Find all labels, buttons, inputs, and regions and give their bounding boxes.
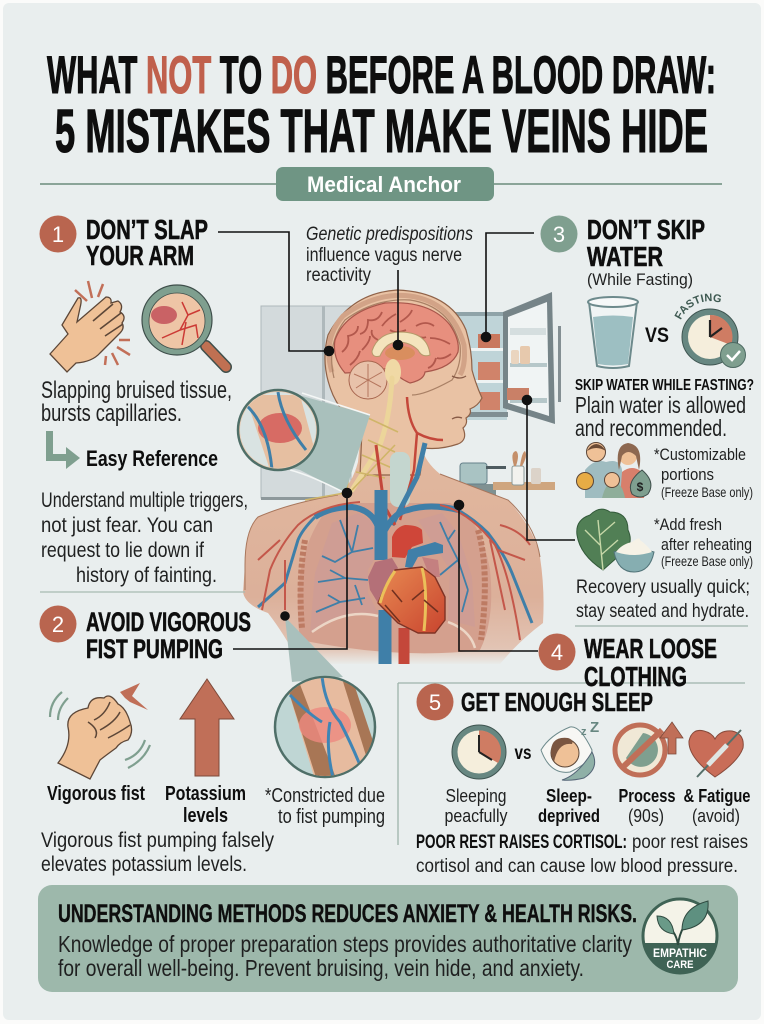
heading 1: YOUR ARM: [86, 240, 194, 271]
number badge 3: [540, 216, 578, 252]
icon: sleeping person: [541, 719, 599, 780]
label: constricted note: *Constricted due: [265, 785, 385, 807]
labels: sleep comparison: [444, 786, 750, 826]
text: fist pumping explanation: elevates potassium levels.: [41, 853, 247, 876]
genetic predispositions note: reactivity: [306, 265, 371, 286]
arrow: easy reference: [46, 431, 80, 469]
icon: sleep clock: [452, 725, 506, 779]
heart: [368, 525, 445, 633]
torso and shoulders: [243, 440, 544, 664]
number badge 1: 1: [52, 222, 64, 247]
text: add fresh: *Add fresh: [654, 515, 722, 534]
genetic predispositions note: Genetic predispositions: [306, 224, 473, 245]
number badge 5: 5: [429, 690, 441, 715]
icon: heart with syringe: [689, 730, 743, 777]
text: multiple triggers: history of fainting.: [76, 564, 217, 587]
eye and mouth: [452, 376, 466, 419]
summary body: Knowledge of proper preparation steps provides authoritative clarity: [58, 931, 632, 957]
genetic predispositions note: influence vagus nerve: [306, 245, 462, 266]
label: vigorous fist: Vigorous fist: [47, 783, 145, 805]
labels: sleep comparison: Sleeping: [446, 786, 506, 806]
text: fist pumping explanation: Vigorous fist pumping falsely: [41, 829, 274, 852]
labels: sleep comparison: Sleep-: [546, 786, 592, 806]
heading 2: AVOID VIGOROUS: [86, 607, 251, 637]
number badge 5: [416, 684, 454, 720]
heading 2: FIST PUMPING: [86, 634, 223, 664]
title: [47, 46, 716, 165]
heading 1: [86, 214, 208, 271]
brain: [334, 303, 458, 399]
text: multiple triggers: [41, 489, 248, 587]
labels: sleep comparison: deprived: [538, 806, 600, 826]
panel: mistake 5: [416, 684, 750, 877]
genetic predispositions note: [306, 224, 473, 286]
number badge 3: 3: [553, 222, 565, 247]
label: potassium levels: levels: [183, 805, 228, 827]
text: slapping explanation: Slapping bruised tissue,: [41, 377, 232, 404]
panel: bottom summary: [38, 885, 738, 992]
throat: [390, 452, 410, 507]
text: customizable portions: portions: [661, 465, 714, 484]
text: multiple triggers: Understand multiple triggers,: [41, 489, 248, 512]
text: vs: VS: [645, 324, 669, 347]
panel: mistake 1: [40, 214, 248, 592]
labels: sleep comparison: (avoid): [692, 806, 740, 826]
summary body: for overall well-being. Prevent bruising, vein hide, and anxiety.: [58, 955, 584, 981]
illustration: fridge background: [261, 292, 561, 500]
icon: water glass: [588, 297, 638, 368]
lungs: [310, 513, 378, 633]
panel: mistake 4: [538, 633, 717, 692]
text: multiple triggers: request to lie down if: [41, 539, 204, 562]
medical anchor banner: Medical Anchor: [307, 172, 461, 197]
connector lines: [218, 232, 575, 651]
text: skip water while fasting: [575, 377, 754, 441]
summary body: [58, 931, 632, 981]
heading 4: [584, 633, 717, 692]
number badge 2: 2: [52, 612, 64, 637]
text: poor rest raises cortisol: poor rest raises: [632, 832, 748, 853]
icon: fasting clock: [674, 294, 746, 368]
number badge 2: [40, 606, 76, 642]
heading 3: DON’T SKIP: [587, 214, 705, 245]
chest cavity: [298, 503, 491, 653]
ribs: [301, 530, 485, 640]
text: slapping explanation: [41, 377, 232, 427]
badge: empathic care: [642, 898, 718, 974]
head: [325, 290, 482, 475]
text: vs small: vs: [514, 743, 532, 764]
text: fist pumping explanation: [41, 829, 274, 876]
number badge 4: [538, 634, 576, 670]
icon: slapping hand: [50, 281, 130, 372]
magnifier: slapped vein closeup: [238, 390, 370, 493]
labels: sleep comparison: (90s): [628, 806, 664, 826]
icon: magnifier bruise: [142, 285, 226, 367]
number badge 4: 4: [551, 640, 563, 665]
shoulder outlines: [245, 474, 540, 590]
icon: fasting clock: FASTING: [674, 294, 722, 320]
icon: family with money: $: [637, 480, 644, 494]
text: customizable portions: *Customizable: [654, 445, 746, 464]
icon: up arrow: [180, 679, 234, 776]
labels: sleep comparison: peacfully: [444, 806, 508, 826]
diaphragm: [312, 614, 475, 648]
number badge 1: [40, 216, 76, 252]
panel: mistake 3: [540, 214, 754, 627]
neck vessels: [400, 397, 443, 520]
labels: sleep comparison: Process: [618, 786, 676, 806]
medical anchor banner: [40, 167, 722, 201]
text: customizable portions: [654, 445, 753, 500]
label: potassium levels: [165, 783, 246, 827]
icon: family with money: [576, 442, 651, 498]
icon: crossed clock with arrow: [615, 722, 683, 775]
illustration: kitchen counter: [446, 451, 555, 496]
text: multiple triggers: not just fear. You can: [41, 514, 213, 537]
heading 5: GET ENOUGH SLEEP: [461, 687, 653, 717]
text: slapping explanation: bursts capillaries.: [41, 400, 182, 427]
labels: sleep comparison: & Fatigue: [684, 786, 750, 806]
text: add fresh: [654, 515, 753, 569]
magnifier: constricted vein closeup: [275, 617, 376, 790]
blood vessels: [315, 507, 378, 527]
heading 3: (While Fasting): [587, 270, 693, 289]
spinal cord and nerves: [385, 359, 401, 385]
icon: fist: [50, 683, 150, 779]
skull rings: [329, 295, 464, 375]
badge: empathic care: CARE: [666, 959, 694, 971]
icon: sleeping person: z: [581, 726, 587, 738]
icon: kale and yogurt: [577, 509, 654, 572]
label: constricted note: to fist pumping: [278, 806, 385, 828]
heading 2: [86, 607, 251, 664]
heading 3: [587, 214, 705, 289]
label: potassium levels: Potassium: [165, 783, 246, 805]
text: recovery: [576, 577, 750, 622]
heading 1: DON’T SLAP: [86, 214, 208, 245]
badge: empathic care: EMPATHIC: [653, 946, 707, 960]
illustration: human anatomy figure: [243, 290, 544, 664]
label: easy reference: Easy Reference: [86, 446, 218, 471]
icon: sleeping person: Z: [590, 719, 599, 736]
heading 4: CLOTHING: [584, 661, 687, 692]
panel: mistake 2: [40, 606, 385, 876]
heading 3: WATER: [587, 241, 663, 272]
text: poor rest raises cortisol: POOR REST RAISES CORTISOL:: [416, 832, 627, 853]
label: constricted note: [265, 785, 385, 828]
text: poor rest raises cortisol: [416, 832, 748, 877]
